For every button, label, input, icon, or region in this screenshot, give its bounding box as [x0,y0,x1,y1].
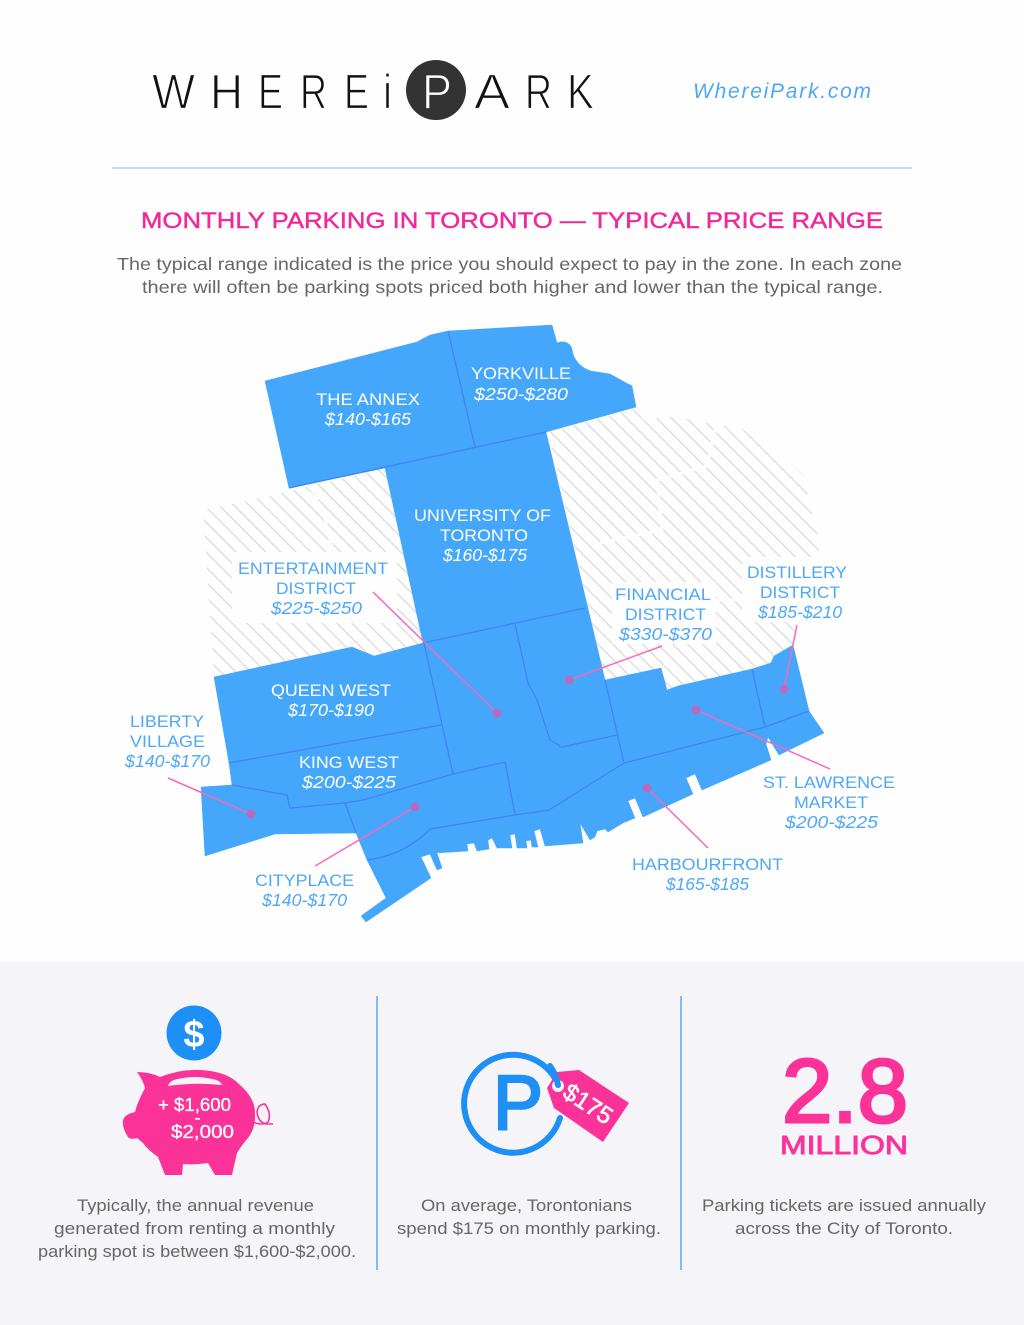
hatched surrounding area: west [203,468,423,677]
label: St. Lawrence Market [763,773,895,832]
label: CityPlace [255,871,354,910]
logo: WhereiPark wordmark: K [567,66,594,120]
intro paragraph: The typical range indicated is the price you should expect to pay in the zone. In each zone [117,254,902,274]
label: Financial District: $330-$370 [618,624,712,644]
label: Financial District: FINANCIAL [615,585,711,604]
label: Entertainment District [238,559,388,618]
icon: piggy bank: $2,000 [171,1122,234,1142]
intro paragraph: there will often be parking spots priced both higher and lower than the typical range. [142,277,883,297]
logo: WhereiPark wordmark: i [383,66,392,120]
label: Harbourfront: $165-$185 [665,874,749,894]
logo: WhereiPark wordmark [152,60,594,120]
label: Yorkville: YORKVILLE [471,364,571,383]
label: Yorkville [471,364,571,404]
label: St. Lawrence Market: ST. LAWRENCE [763,773,895,792]
icon: parking sign with price tag: $175 [558,1079,617,1130]
icon: parking sign with price tag [464,1055,629,1153]
website link: WhereiPark.com [693,80,871,103]
label: Financial District [615,585,712,644]
label: CityPlace: CITYPLACE [255,871,354,890]
label: Liberty Village: $140-$170 [124,751,210,771]
label: Entertainment District: DISTRICT [276,579,356,598]
callout leader: Distillery District [780,625,797,694]
label: Entertainment District: $225-$250 [270,598,362,618]
label: University of Toronto [414,506,551,565]
label: King West [299,753,399,792]
label: Harbourfront [632,855,783,894]
label: Financial District: DISTRICT [625,605,706,624]
callout leader: Harbourfront [642,784,708,848]
stat: 2.8 million: MILLION [780,1130,908,1160]
label: St. Lawrence Market: MARKET [794,793,868,812]
label: The Annex: THE ANNEX [316,390,420,409]
label: King West: $200-$225 [301,772,396,792]
label: Queen West [271,681,391,720]
text: average spend description: spend $175 on monthly parking. [397,1219,661,1238]
callout leader: St. Lawrence Market [692,706,830,769]
text: parking tickets description: across the City of Toronto. [735,1219,953,1238]
label: Liberty Village: LIBERTY [130,712,204,731]
text: average spend description [397,1196,661,1238]
label: Queen West: QUEEN WEST [271,681,391,700]
label: Distillery District: $185-$210 [757,602,842,622]
title: MONTHLY PARKING IN TORONTO — TYPICAL PRICE RANGE [141,208,883,233]
logo: WhereiPark wordmark: E [258,66,283,120]
icon: dollar coin: $ [183,1014,205,1056]
text: revenue description: parking spot is between $1,600-$2,000. [38,1242,356,1261]
text: average spend description: On average, Torontonians [421,1196,632,1215]
logo: WhereiPark wordmark: P [422,66,452,120]
intro paragraph [117,254,902,297]
icon: parking sign with price tag: P [493,1060,543,1146]
callout leader: Financial District [564,646,662,684]
text: parking tickets description: Parking tickets are issued annually [702,1196,987,1215]
label: Queen West: $170-$190 [287,700,374,720]
logo: WhereiPark wordmark: W [152,66,196,120]
label: Distillery District: DISTRICT [760,583,840,602]
text: revenue description: Typically, the annual revenue [77,1196,314,1215]
icon: dollar coin [166,1006,222,1060]
label: St. Lawrence Market: $200-$225 [784,812,878,832]
map of Toronto parking zones [201,325,824,922]
logo: WhereiPark wordmark: R [300,66,327,120]
logo: WhereiPark wordmark: A [474,66,510,120]
label: CityPlace: $140-$170 [261,890,347,910]
hatched surrounding area: east [548,408,820,690]
icon: piggy bank [123,1070,273,1175]
icon: piggy bank: + $1,600 [158,1095,231,1115]
label: Yorkville: $250-$280 [473,384,568,404]
label: University of Toronto: UNIVERSITY OF [414,506,551,525]
callout leader: CityPlace [315,802,420,866]
label: The Annex [316,390,420,429]
text: revenue description [38,1196,356,1261]
logo: WhereiPark wordmark: E [344,66,369,120]
panel: bottom statistics band [0,962,1024,1325]
label: Entertainment District: ENTERTAINMENT [238,559,388,578]
label: Liberty Village: VILLAGE [130,732,205,751]
label: Distillery District [747,563,847,622]
stat: 2.8 million: 2.8 [782,1042,908,1142]
text: revenue description: generated from renting a monthly [54,1219,336,1238]
callout leader: Entertainment District [373,592,502,718]
logo: WhereiPark wordmark: H [210,66,243,120]
label: The Annex: $140-$165 [324,409,411,429]
label: Distillery District: DISTILLERY [747,563,847,582]
label: Harbourfront: HARBOURFRONT [632,855,783,874]
label: Liberty Village [124,712,210,771]
logo: WhereiPark wordmark: R [525,66,552,120]
label: University of Toronto: TORONTO [440,526,528,545]
label: University of Toronto: $160-$175 [442,545,527,565]
callout leader: Liberty Village [168,778,256,818]
label: King West: KING WEST [299,753,399,772]
text: parking tickets description [702,1196,987,1238]
